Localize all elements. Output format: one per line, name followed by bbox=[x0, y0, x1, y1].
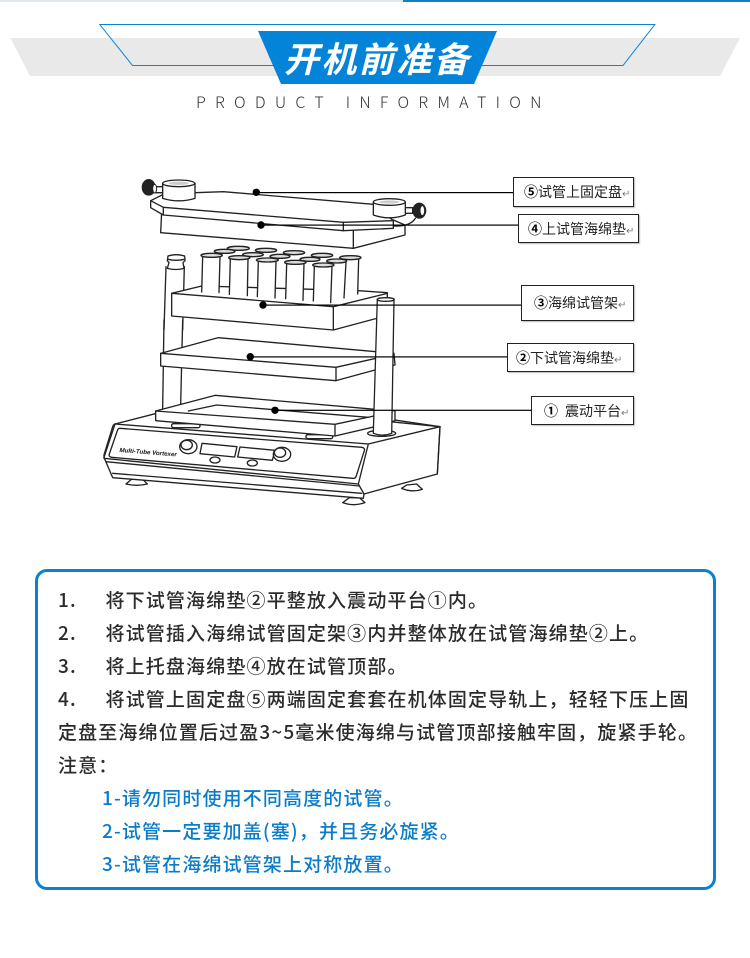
left hand wheel and collar bbox=[142, 179, 195, 201]
note 3: 3-试管在海绵试管架上对称放置。 bbox=[102, 850, 404, 877]
plate ② bbox=[161, 338, 395, 381]
label ②: ②下试管海绵垫↵ bbox=[516, 348, 622, 368]
top accent bar bbox=[0, 0, 750, 2]
label ③: ③海绵试管架↵ bbox=[534, 293, 626, 313]
post base ring bbox=[368, 430, 396, 436]
notes heading: 注意： bbox=[58, 751, 118, 778]
subtitle: PRODUCT INFORMATION bbox=[196, 89, 551, 113]
step 4 line 1: 将试管上固定盘⑤两端固定套套在机体固定导轨上，轻轻下压上固 bbox=[106, 685, 690, 712]
control knobs, displays and buttons bbox=[180, 440, 197, 454]
step 4 line 1: 4. bbox=[58, 685, 77, 712]
leader lines and dots bbox=[247, 189, 532, 414]
label ③ bbox=[521, 285, 634, 321]
upper clamp plate ⑤ bbox=[151, 192, 393, 231]
tubes back row rims bbox=[214, 246, 333, 261]
label ④ bbox=[518, 214, 639, 243]
note 1: 1-请勿同时使用不同高度的试管。 bbox=[102, 784, 404, 811]
upper part: clamp plate, pad, tubes, holder bbox=[142, 179, 426, 330]
panel: instructions bbox=[35, 569, 716, 890]
right hand wheel and collar bbox=[373, 199, 426, 226]
left rear post bbox=[164, 255, 185, 330]
tubes right side bbox=[327, 256, 361, 298]
step 4 line 2: 定盘至海绵位置后过盈3~5毫米使海绵与试管顶部接触牢固，旋紧手轮。 bbox=[58, 718, 698, 745]
left rear post bbox=[163, 320, 183, 408]
brand text: Multi-Tube Vortexer bbox=[119, 447, 178, 459]
upper sponge pad ④ bbox=[161, 212, 405, 248]
label ④: ④上试管海绵垫↵ bbox=[528, 219, 634, 239]
label ① bbox=[531, 396, 634, 425]
step 2: 将试管插入海绵试管固定架③内并整体放在试管海绵垫②上。 bbox=[106, 619, 649, 646]
title: 开机前准备 bbox=[284, 32, 471, 83]
tubes front row bbox=[201, 253, 334, 303]
header banner bbox=[10, 24, 740, 84]
note 2: 2-试管一定要加盖(塞)，并且务必旋紧。 bbox=[102, 817, 460, 844]
label ①: ① 震动平台↵ bbox=[544, 401, 629, 421]
step 1: 1. bbox=[58, 586, 77, 613]
label ⑤ bbox=[513, 177, 634, 207]
platform ① bbox=[156, 395, 395, 439]
step 2: 2. bbox=[58, 619, 77, 646]
step 1: 将下试管海绵垫②平整放入震动平台①内。 bbox=[106, 586, 488, 613]
steps text block bbox=[58, 586, 698, 778]
notes text block bbox=[102, 784, 460, 877]
lower part: base, platform, pad, left post bbox=[104, 320, 440, 505]
step 3: 将上托盘海绵垫④放在试管顶部。 bbox=[106, 652, 408, 679]
sponge tube holder ③ bbox=[172, 286, 387, 330]
label ⑤: ⑤试管上固定盘↵ bbox=[524, 182, 630, 202]
front right post bbox=[373, 298, 394, 435]
feet bbox=[126, 479, 422, 505]
diagram: multi-tube vortexer exploded view bbox=[103, 179, 531, 506]
step 3: 3. bbox=[58, 652, 77, 679]
base unit bbox=[104, 413, 440, 498]
label ② bbox=[507, 343, 634, 372]
